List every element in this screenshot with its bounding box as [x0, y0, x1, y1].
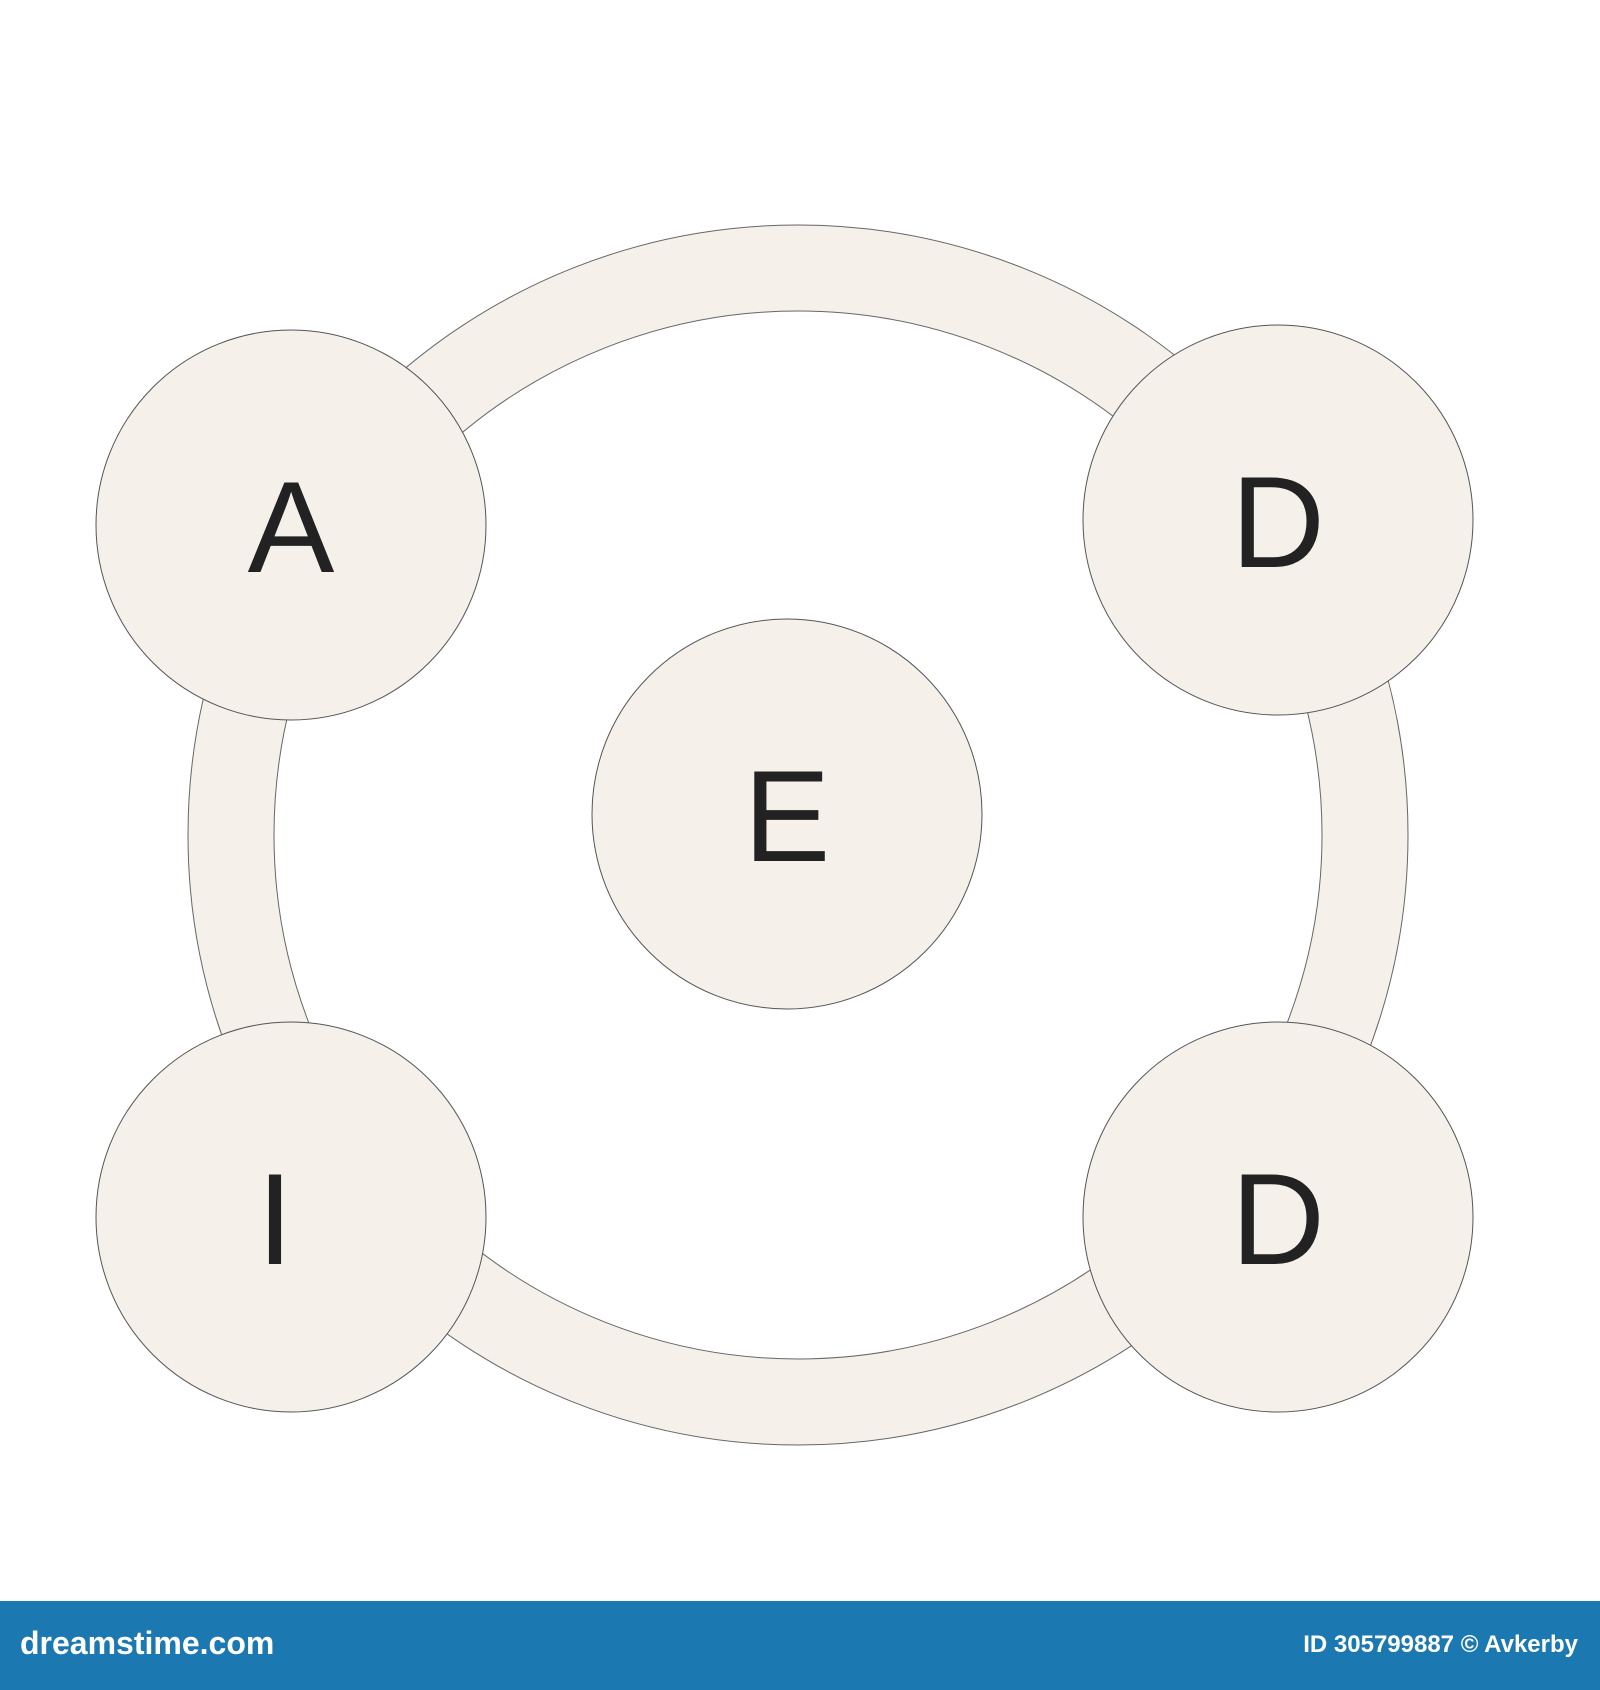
circle: I: I — [257, 1146, 293, 1292]
circle: D bottom: D — [1231, 1146, 1325, 1292]
footer logo text: dreamstime.com — [20, 1625, 274, 1661]
circle: I — [96, 1022, 486, 1412]
circle: D top — [1083, 325, 1473, 715]
circle: A: A — [248, 454, 335, 600]
circle: E — [592, 619, 982, 1009]
ring — [188, 225, 1408, 1445]
circle: D top: D — [1231, 449, 1325, 595]
footer bar — [0, 1601, 1600, 1690]
footer id text: ID 305799887 © Avkerby — [1303, 1631, 1578, 1658]
circle: E: E — [744, 743, 830, 889]
circle: A — [96, 330, 486, 720]
circle: D bottom — [1083, 1022, 1473, 1412]
